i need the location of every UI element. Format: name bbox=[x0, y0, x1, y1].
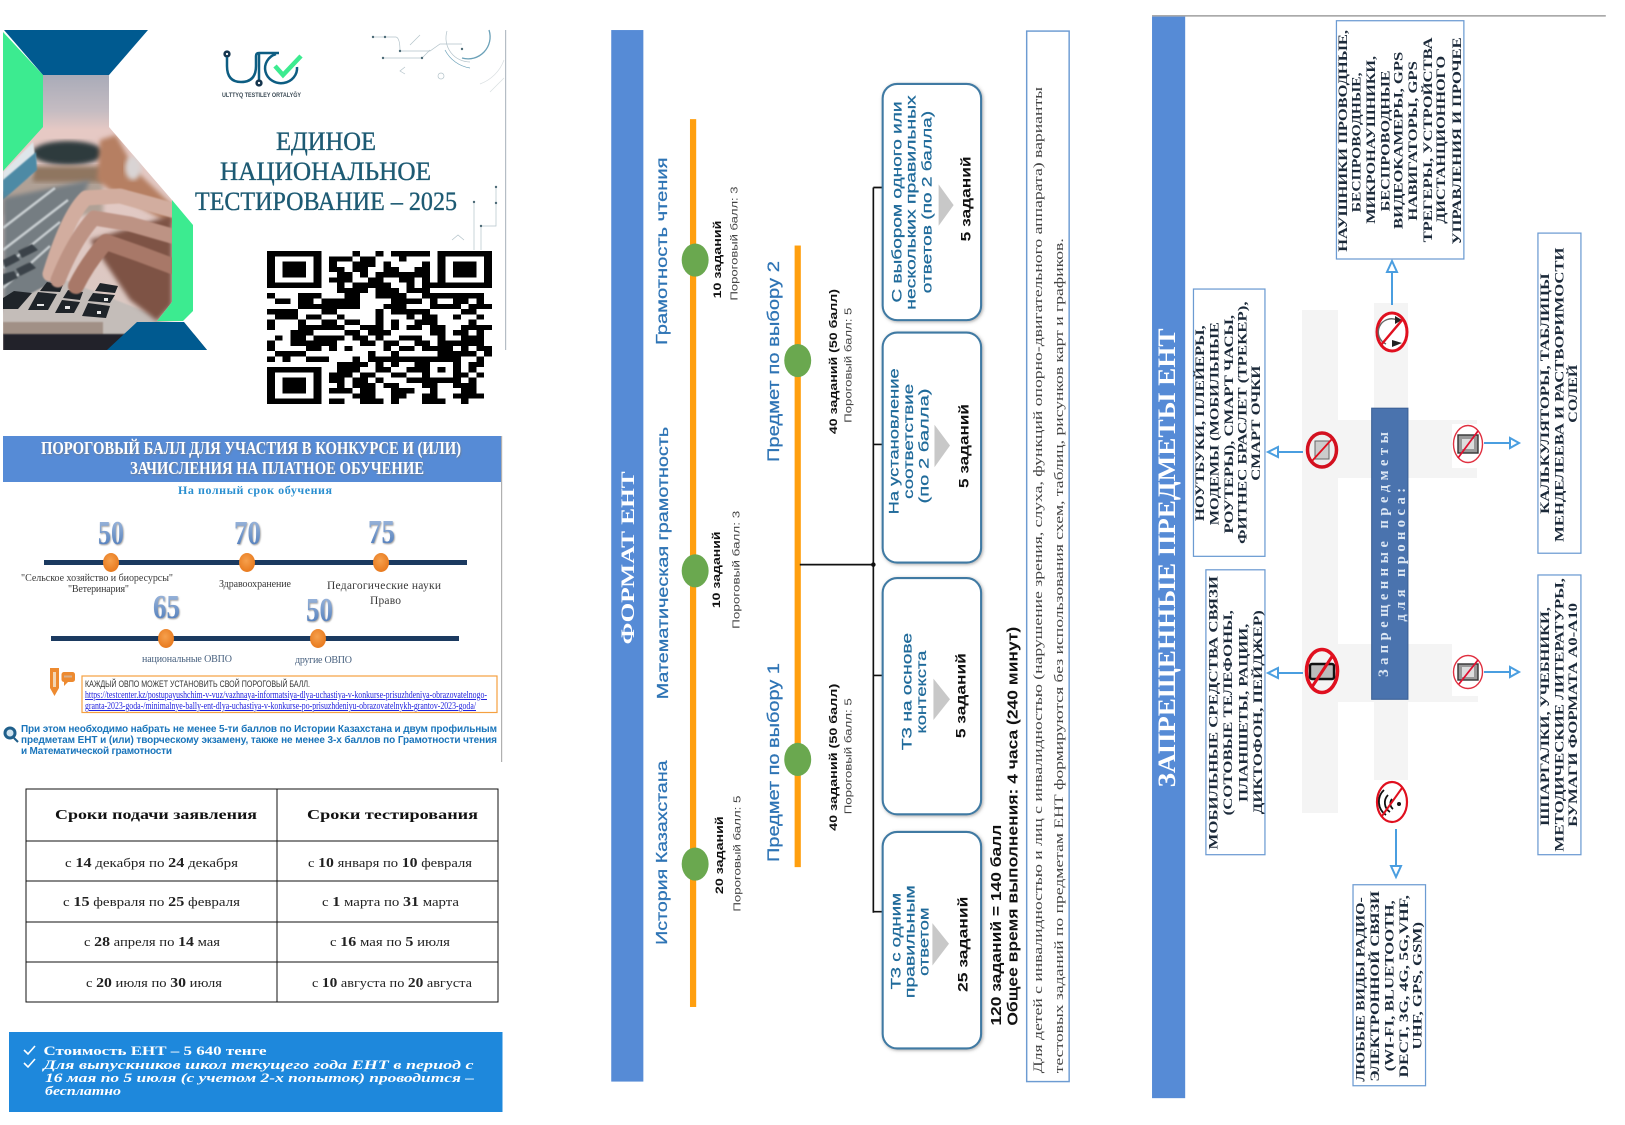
icon: no phone bbox=[1306, 649, 1337, 692]
box: radio communications: ЭЛЕКТРОННОЙ СВЯЗИ bbox=[1367, 891, 1382, 1082]
task box: multiple answers: 5 заданий bbox=[959, 156, 974, 241]
icon: check marks bbox=[24, 1046, 35, 1067]
timeline: mandatory subjects: Пороговый балл: 3 bbox=[729, 186, 741, 300]
box: headphones and trackers: МИКРОНАУШНИКИ, bbox=[1363, 56, 1378, 224]
timeline: mandatory subjects: Математическая грамотность bbox=[655, 427, 672, 699]
box: laptops and wearables: ФИТНЕС БРАСЛЕТ (ТРЕКЕР), bbox=[1234, 301, 1249, 544]
score timeline 1: 75 bbox=[368, 514, 395, 551]
timeline: mandatory subjects bbox=[654, 119, 744, 1007]
green shape left bbox=[3, 32, 43, 171]
box: headphones and trackers: ДИСТАНЦИОННОГО bbox=[1433, 56, 1448, 224]
icon: no books bbox=[1453, 655, 1482, 688]
totals: Общее время выполнения: 4 часа (240 минут) bbox=[1005, 627, 1021, 1026]
requirements paragraph: предметам ЕНТ и (или) творческому экзамену, также не менее 3-х баллов по Грамотности чтения bbox=[21, 734, 497, 746]
timeline: mandatory subjects: 10 заданий bbox=[712, 221, 724, 298]
score timeline 1: "Сельское хозяйство и биоресурсы" bbox=[21, 573, 173, 584]
score timeline 1: Право bbox=[370, 595, 401, 607]
task box: multiple answers bbox=[883, 84, 981, 320]
logo: ULTTYQ TESTILEY ORTALYĞY bbox=[222, 90, 302, 99]
panel: threshold score bbox=[3, 436, 502, 762]
box: radio communications: DECT, 3G, 4G, 5G,VHF, bbox=[1396, 895, 1411, 1077]
table: application and testing dates: с 20 июля по 30 июля bbox=[86, 975, 222, 990]
arrow: left bottom bbox=[1268, 668, 1303, 678]
task box: single answer: ответом bbox=[915, 908, 931, 976]
timeline: mandatory subjects: История Казахстана bbox=[654, 760, 671, 945]
panel: cost note bbox=[9, 1032, 502, 1112]
arrow: up bbox=[1387, 261, 1397, 305]
icon: magnifier bbox=[4, 726, 18, 742]
table: application and testing dates: с 15 февраля по 25 февраля bbox=[63, 894, 240, 909]
note box with link: КАЖДЫЙ ОВПО МОЖЕТ УСТАНОВИТЬ СВОЙ ПОРОГОВЫЙ БАЛЛ. bbox=[85, 678, 310, 689]
hero photo: hands on laptop keyboard bbox=[3, 75, 208, 352]
score timeline 2 bbox=[51, 589, 459, 666]
box: laptops and wearables: СМАРТ ОЧКИ bbox=[1248, 366, 1263, 481]
subheading: На полный срок обучения bbox=[178, 483, 332, 497]
QR code bbox=[267, 251, 492, 404]
task box: single answer bbox=[883, 832, 981, 1048]
table: application and testing dates: Сроки подачи заявления bbox=[55, 807, 257, 822]
box: mobile communications: ДИКТОФОН, ПЕЙДЖЕР) bbox=[1250, 610, 1265, 814]
box: calculators and tables: СОЛЕЙ bbox=[1565, 365, 1580, 423]
timeline: mandatory subjects: Пороговый балл: 3 bbox=[731, 510, 743, 629]
box: cheat sheets and books: МЕТОДИЧЕСКИЕ ЛИТЕРАТУРЫ, bbox=[1551, 578, 1566, 852]
box: laptops and wearables: МОДЕМЫ (МОБИЛЬНЫЕ bbox=[1206, 322, 1221, 525]
threshold heading bar: ЗАЧИСЛЕНИЯ НА ПЛАТНОЕ ОБУЧЕНИЕ bbox=[130, 458, 424, 478]
box: laptops and wearables: РОУТЕРЫ), СМАРТ ЧАСЫ, bbox=[1221, 315, 1236, 534]
main title: ТЕСТИРОВАНИЕ – 2025 bbox=[195, 187, 457, 216]
timeline: mandatory subjects: 10 заданий bbox=[711, 531, 723, 608]
score timeline 1: 50 bbox=[98, 515, 124, 552]
score timeline 2: 65 bbox=[153, 589, 180, 626]
box: cheat sheets and books: ШПАРГАЛКИ, УЧЕБНИКИ, bbox=[1537, 607, 1552, 826]
box: headphones and trackers: НАУШНИКИ ПРОВОДНЫЕ, bbox=[1335, 30, 1350, 252]
task box: matching bbox=[883, 333, 981, 563]
score timeline 1 bbox=[21, 514, 467, 607]
box: radio communications: (WI-FI, BLUETOOTH, bbox=[1381, 900, 1396, 1071]
box: mobile communications: ПЛАНШЕТЫ, РАЦИИ, bbox=[1235, 624, 1250, 802]
main title bbox=[195, 127, 457, 216]
score timeline 2: 50 bbox=[306, 592, 333, 629]
prohibited heading bar bbox=[1152, 17, 1185, 1098]
icon: no remote bbox=[1377, 313, 1407, 351]
logo bbox=[222, 52, 302, 99]
box: laptops and wearables: НОУТБУКИ, ПЛЕЙЕРЫ, bbox=[1192, 325, 1207, 521]
score timeline 1: Педагогические науки bbox=[327, 580, 441, 592]
timeline: elective subjects: Пороговый балл: 5 bbox=[843, 698, 855, 814]
main title: ЕДИНОЕ bbox=[276, 127, 376, 156]
cost text: Для выпускников школ текущего года ЕНТ в период с bbox=[42, 1058, 474, 1072]
connector lines bbox=[800, 188, 883, 913]
task box: matching: 5 заданий bbox=[957, 404, 972, 488]
box: radio communications: ЛЮБЫЕ ВИДЫ РАДИО- bbox=[1352, 897, 1367, 1082]
panel: title cover bbox=[3, 30, 506, 404]
box: calculators and tables bbox=[1537, 233, 1581, 553]
task box: multiple answers: ответов (по 2 балла) bbox=[918, 111, 934, 293]
task box: single answer: ТЗ с одним bbox=[887, 893, 903, 989]
timeline: elective subjects bbox=[764, 246, 855, 867]
note box with link: https://testcenter.kz/postupayushchim-v-vuz/vazhnaya-informatsiya-dlya-uchastiya-v-konkurse-prisuzhdeniya-obrazovatelnogo- bbox=[85, 690, 487, 701]
requirements paragraph bbox=[21, 723, 497, 757]
arrow: left top bbox=[1268, 447, 1303, 457]
box: mobile communications: (СОТОВЫЕ ТЕЛЕФОНЫ, bbox=[1220, 610, 1235, 815]
box: headphones and trackers: БЕСПРОВОДНЫЕ bbox=[1377, 70, 1392, 211]
note box with link: granta-2023-goda-/minimalnye-bally-ent-dlya-uchastiya-v-konkurse-po-prisuzhdeniyu-obrazovatelnykh-grantov-2023-goda/ bbox=[85, 701, 476, 712]
arrow: right top bbox=[1484, 438, 1519, 448]
threshold heading bar bbox=[3, 436, 501, 482]
threshold heading bar: ПОРОГОВЫЙ БАЛЛ ДЛЯ УЧАСТИЯ В КОНКУРСЕ И (ИЛИ) bbox=[41, 437, 461, 459]
timeline: elective subjects: Предмет по выбору 1 bbox=[764, 663, 783, 862]
timeline: elective subjects: Предмет по выбору 2 bbox=[764, 261, 783, 462]
box: cheat sheets and books bbox=[1537, 575, 1581, 855]
timeline: mandatory subjects: Грамотность чтения bbox=[654, 157, 671, 345]
blue shape top bbox=[4, 30, 148, 75]
table: application and testing dates bbox=[26, 789, 498, 1002]
box: headphones and trackers: БЕСПРОВОДНЫЕ, bbox=[1348, 73, 1363, 212]
task box: matching: соответствие bbox=[900, 384, 916, 499]
task box: context: контекста bbox=[913, 650, 929, 733]
timeline: elective subjects: 40 заданий (50 балл) bbox=[828, 684, 840, 831]
box: cheat sheets and books: БУМАГИ ФОРМАТА А0-А10 bbox=[1565, 603, 1580, 827]
box: radio communications: UHF, GPS, GSM) bbox=[1409, 922, 1424, 1049]
icon: no wifi bbox=[1377, 782, 1407, 822]
panel: test format bbox=[611, 30, 1069, 1082]
table: application and testing dates: с 16 мая по 5 июля bbox=[330, 934, 450, 949]
requirements paragraph: и Математической грамотности bbox=[21, 746, 172, 757]
icon: pencil and speech bubble bbox=[50, 668, 75, 696]
note box: disabilities: тестовых заданий по предметам ЕНТ формируются без использования схем, таблиц, рисунков карт и графиков. bbox=[1051, 238, 1066, 1073]
totals: 120 заданий = 140 балл bbox=[989, 825, 1005, 1026]
table: application and testing dates: с 14 декабря по 24 декабря bbox=[65, 855, 238, 870]
format heading bar: ФОРМАТ ЕНТ bbox=[618, 471, 639, 644]
box: headphones and trackers: НАВИГАТОРЫ, GPS bbox=[1405, 61, 1420, 221]
centre label: для проноса: bbox=[1393, 488, 1409, 622]
table: application and testing dates: с 1 марта по 31 марта bbox=[322, 894, 460, 909]
box: headphones and trackers: УПРАВЛЕНИЯ И ПРОЧЕЕ bbox=[1449, 37, 1464, 244]
timeline: mandatory subjects: 20 заданий bbox=[714, 816, 726, 894]
task box: multiple answers: нескольких правильных bbox=[902, 95, 918, 310]
score timeline 1: "Ветеринария" bbox=[68, 584, 129, 595]
totals bbox=[989, 627, 1021, 1026]
task box: context: ТЗ на основе bbox=[899, 633, 915, 750]
task box: matching: На установление bbox=[886, 368, 902, 514]
requirements paragraph: При этом необходимо набрать не менее 5-ти баллов по Истории Казахстана и двум профильным bbox=[21, 723, 497, 735]
arrow: down bbox=[1391, 829, 1401, 877]
box: headphones and trackers bbox=[1335, 21, 1464, 259]
table: application and testing dates: с 10 августа по 20 августа bbox=[312, 975, 473, 990]
box: laptops and wearables bbox=[1192, 289, 1265, 556]
box: calculators and tables: МЕНДЕЛЕЕВА И РАСТВОРИМОСТИ bbox=[1551, 248, 1566, 542]
score timeline 2: другие ОВПО bbox=[295, 655, 352, 666]
score timeline 1: Здравоохранение bbox=[219, 579, 292, 590]
note box: disabilities bbox=[1027, 31, 1069, 1082]
box: mobile communications: МОБИЛЬНЫЕ СРЕДСТВА СВЯЗИ bbox=[1205, 576, 1220, 850]
cost text: Стоимость ЕНТ – 5 640 тенге bbox=[44, 1044, 267, 1058]
green shape right bbox=[157, 200, 193, 321]
task box: multiple answers: С выбором одного или bbox=[888, 102, 904, 303]
score timeline 2: национальные ОВПО bbox=[142, 654, 232, 665]
format heading bar bbox=[611, 30, 643, 1082]
centre label bbox=[1372, 408, 1409, 699]
task box: context: 5 заданий bbox=[954, 653, 969, 738]
centre label: Запрещенные предметы bbox=[1376, 432, 1392, 677]
note box: disabilities: Для детей с инвалидностью и лиц с инвалидностью (нарушение зрения, слуха, функций опорно-двигательного аппарата) варианты bbox=[1030, 87, 1045, 1073]
icon: no laptop bbox=[1307, 433, 1336, 467]
task box: matching: (по 2 балла) bbox=[915, 389, 931, 503]
cost text bbox=[42, 1044, 475, 1098]
task box: context bbox=[883, 578, 981, 814]
note box with link bbox=[82, 676, 497, 712]
main title: НАЦИОНАЛЬНОЕ bbox=[220, 157, 431, 186]
table: application and testing dates: с 28 апреля по 14 мая bbox=[84, 934, 220, 949]
blue shape bottom bbox=[107, 322, 207, 350]
score timeline 1: 70 bbox=[234, 515, 261, 552]
task box: single answer: правильным bbox=[901, 885, 917, 998]
box: mobile communications bbox=[1205, 570, 1265, 855]
task box: single answer: 25 заданий bbox=[956, 897, 971, 992]
box: radio communications bbox=[1352, 885, 1426, 1086]
box: calculators and tables: КАЛЬКУЛЯТОРЫ, ТАБЛИЦЫ bbox=[1537, 273, 1552, 514]
table: application and testing dates: с 10 января по 10 февраля bbox=[308, 855, 472, 870]
cost text: 16 мая по 5 июля (с учетом 2-х попыток) проводится – bbox=[45, 1071, 475, 1085]
timeline: mandatory subjects: Пороговый балл: 5 bbox=[732, 795, 744, 912]
timeline: elective subjects: 40 заданий (50 балл) bbox=[828, 289, 840, 434]
icon: no calculator bbox=[1453, 425, 1482, 462]
table: application and testing dates: Сроки тестирования bbox=[307, 807, 478, 822]
arrow: right bottom bbox=[1484, 667, 1519, 677]
prohibited heading bar: ЗАПРЕЩЕННЫЕ ПРЕДМЕТЫ ЕНТ bbox=[1154, 328, 1181, 787]
cost text: бесплатно bbox=[45, 1084, 121, 1098]
box: headphones and trackers: ТРЕГЕРЫ, УСТРОЙСТВА bbox=[1420, 36, 1435, 242]
timeline: elective subjects: Пороговый балл: 5 bbox=[843, 307, 855, 423]
box: headphones and trackers: ВИДЕОКАМЕРЫ, GPS bbox=[1391, 52, 1406, 229]
panel: prohibited items bbox=[1152, 15, 1606, 1098]
